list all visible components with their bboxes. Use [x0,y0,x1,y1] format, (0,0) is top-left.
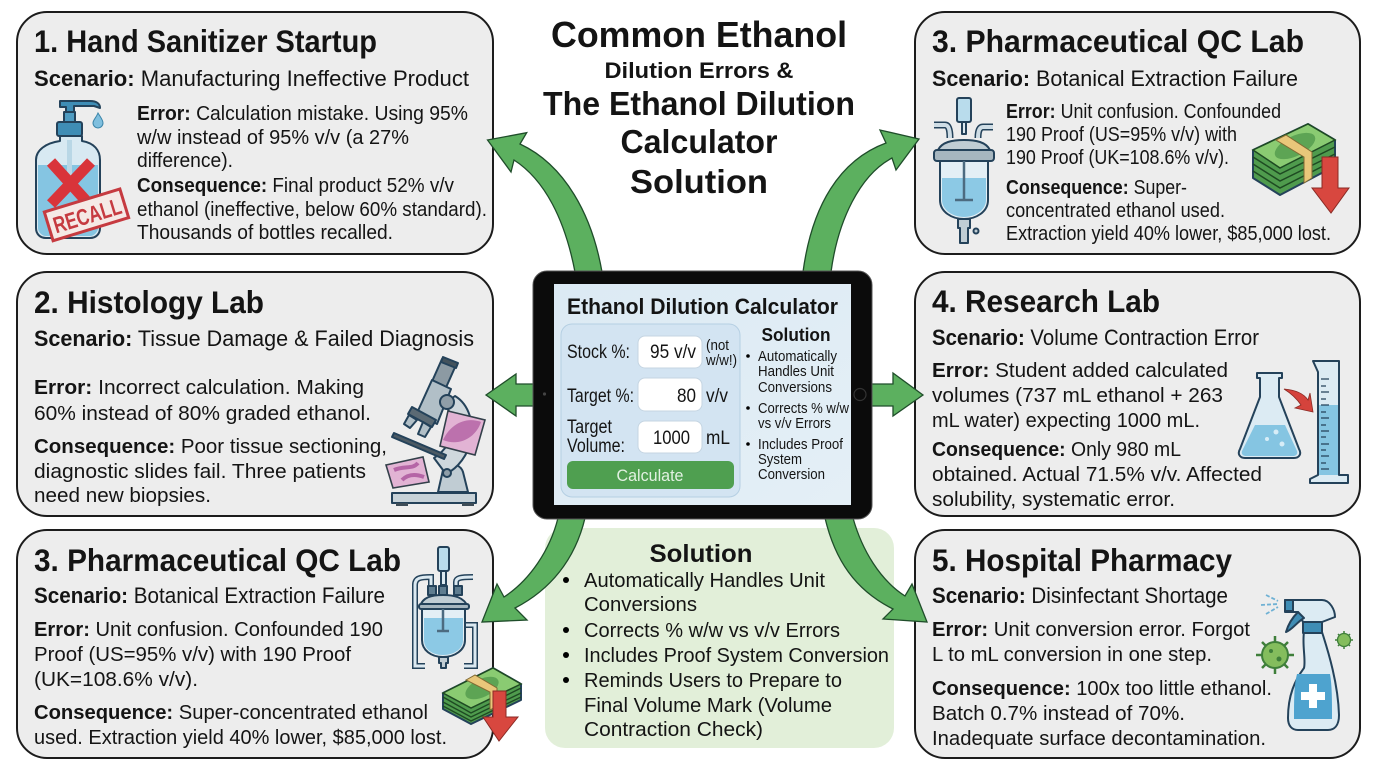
scenario: Scenario: Disinfectant Shortage [932,583,1228,608]
calculator form: Volume: [567,436,625,457]
error text: Proof (US=95% v/v) with 190 Proof [34,643,351,666]
panel: research lab [915,272,1360,516]
error text: volumes (737 mL ethanol + 263 [932,384,1223,407]
error text: Error: Student added calculated [932,359,1228,382]
calculator solution list: vs v/v Errors [758,415,831,432]
arrow: tablet to panel 1 [488,133,602,272]
icon: spray bottle [1261,595,1339,730]
icon: flask [1239,373,1300,458]
scenario: Scenario: Manufacturing Ineffective Product [34,66,470,91]
consequence text: need new biopsies. [34,484,211,507]
solution heading: Solution [650,540,752,568]
arrow: tablet to panel 4 [868,373,923,416]
scenario: Scenario: Tissue Damage & Failed Diagnosis [34,326,474,351]
heading: 4. Research Lab [932,283,1160,319]
solution bullets: Contraction Check) [584,718,763,741]
consequence text: Extraction yield 40% lower, $85,000 lost. [1006,222,1331,245]
heading: 2. Histology Lab [34,284,264,320]
panel: histology lab [17,272,493,516]
icon: virus small [1335,631,1353,649]
title: Common Ethanol [551,14,847,55]
arrow: tablet to top right panel [803,130,919,272]
consequence text: ethanol (ineffective, below 60% standard). [137,198,487,221]
heading: 5. Hospital Pharmacy [932,542,1232,578]
title: Solution [630,163,768,200]
error text [34,618,383,691]
consequence text: Consequence: Super-concentrated ethanol [34,701,428,724]
consequence text: Consequence: Only 980 mL [932,438,1181,461]
calculator form: 1000 [653,428,690,449]
consequence text [932,677,1272,750]
consequence text: Consequence: Final product 52% v/v [137,174,455,197]
calculator solution list: Corrects % w/w [758,400,849,417]
consequence text: Batch 0.7% instead of 70%. [932,702,1185,725]
icon: graduated cylinder [1310,361,1348,483]
solution bullets: Reminds Users to Prepare to [584,669,842,692]
calculator form [561,324,740,497]
calculator form: v/v [706,386,728,407]
calculator form: Stock %: [567,342,630,363]
calculator solution list [746,325,849,483]
icon: red transfer arrow [1284,389,1313,412]
consequence text: Consequence: Poor tissue sectioning, [34,435,387,458]
title [543,14,855,200]
error text: 190 Proof (UK=108.6% v/v). [1006,146,1229,169]
consequence text [34,701,447,749]
consequence text: obtained. Actual 71.5% v/v. Affected [932,463,1262,486]
title: Calculator [620,123,778,160]
calculator solution list: Includes Proof [758,436,844,453]
heading: 3. Pharmaceutical QC Lab [34,542,401,578]
consequence text: solubility, systematic error. [932,488,1175,511]
error text: L to mL conversion in one step. [932,643,1212,666]
calculator solution list: Conversions [758,379,832,396]
calculator form: w/w!) [705,352,737,369]
panel: pharmaceutical qc lab (left) [17,530,521,758]
error text: Error: Unit confusion. Confounded 190 [34,618,383,641]
consequence text [137,174,487,244]
tablet: ethanol dilution calculator [533,271,872,519]
calculator solution list: Handles Unit [758,363,835,380]
calculator form: 80 [677,386,696,407]
calculator form: Target %: [567,386,634,407]
consequence text: used. Extraction yield 40% lower, $85,000 lost. [34,726,447,749]
panel: pharmaceutical qc lab (right) [915,12,1360,254]
error text: w/w instead of 95% v/v (a 27% [136,126,409,149]
arrow: tablet to bottom left panel [482,518,585,622]
calculator form: Target [567,417,613,438]
error text [932,359,1228,432]
error text [1006,100,1281,169]
calculator solution list: Automatically [758,348,837,365]
scenario: Scenario: Volume Contraction Error [932,325,1259,350]
icon: money stack with down arrow [443,668,521,741]
error text: Error: Incorrect calculation. Making [34,376,364,399]
icon: microscope with tissue slides [386,357,485,506]
calculator form: (not [706,337,730,354]
title: Dilution Errors & [604,58,794,83]
consequence text [932,438,1262,511]
error text: Error: Calculation mistake. Using 95% [137,102,468,125]
calculator solution list: Solution [762,325,830,345]
icon: virus large [1256,636,1294,674]
error text: difference). [137,149,233,172]
icon: glass reactor [415,547,475,668]
consequence text: Thousands of bottles recalled. [137,221,393,244]
consequence text [34,435,387,507]
consequence text: Consequence: 100x too little ethanol. [932,677,1272,700]
consequence text [1006,176,1331,245]
arrow: tablet to panel 2 [486,374,536,416]
calculator title: Ethanol Dilution Calculator [567,294,838,319]
panel: hospital pharmacy [915,530,1360,758]
error text [34,376,371,425]
title: The Ethanol Dilution [543,85,855,122]
icon: sanitizer bottle with recall stamp [36,101,129,241]
calculator form: 95 v/v [650,342,696,363]
error text: (UK=108.6% v/v). [34,668,198,691]
error text: 190 Proof (US=95% v/v) with [1006,123,1237,146]
solution bullets: Includes Proof System Conversion [584,644,889,667]
consequence text: Inadequate surface decontamination. [932,727,1266,750]
icon: glass reactor [934,98,994,243]
calculate button [567,461,734,489]
error text [136,102,468,172]
arrow: tablet to hospital panel [825,518,927,622]
solution bullets [563,569,889,741]
solution bullets: Corrects % w/w vs v/v Errors [584,619,840,642]
solution bullets: Final Volume Mark (Volume [584,694,832,717]
calculator form: mL [706,428,730,449]
solution bullets: Automatically Handles Unit [584,569,825,592]
heading: 1. Hand Sanitizer Startup [34,23,377,59]
icon: money stack with down arrow [1253,124,1349,213]
solution bullets: Conversions [584,593,697,616]
calculator solution list: Conversion [758,466,825,483]
error text: Error: Unit confusion. Confounded [1006,100,1281,123]
error text: 60% instead of 80% graded ethanol. [34,402,371,425]
error text [932,618,1250,666]
error text: Error: Unit conversion error. Forgot [932,618,1250,641]
scenario: Scenario: Botanical Extraction Failure [34,583,385,608]
icon: sanitizer bottle with recall stamp: RECALL [50,193,125,238]
calculator solution list: System [758,451,802,468]
consequence text: concentrated ethanol used. [1006,199,1225,222]
heading: 3. Pharmaceutical QC Lab [932,23,1304,59]
panel: solution [545,528,894,748]
calculate button: Calculate [616,466,684,485]
scenario: Scenario: Botanical Extraction Failure [932,66,1298,91]
consequence text: Consequence: Super- [1006,176,1187,199]
panel: hand sanitizer startup [17,12,493,254]
error text: mL water) expecting 1000 mL. [932,409,1200,432]
consequence text: diagnostic slides fail. Three patients [34,460,366,483]
